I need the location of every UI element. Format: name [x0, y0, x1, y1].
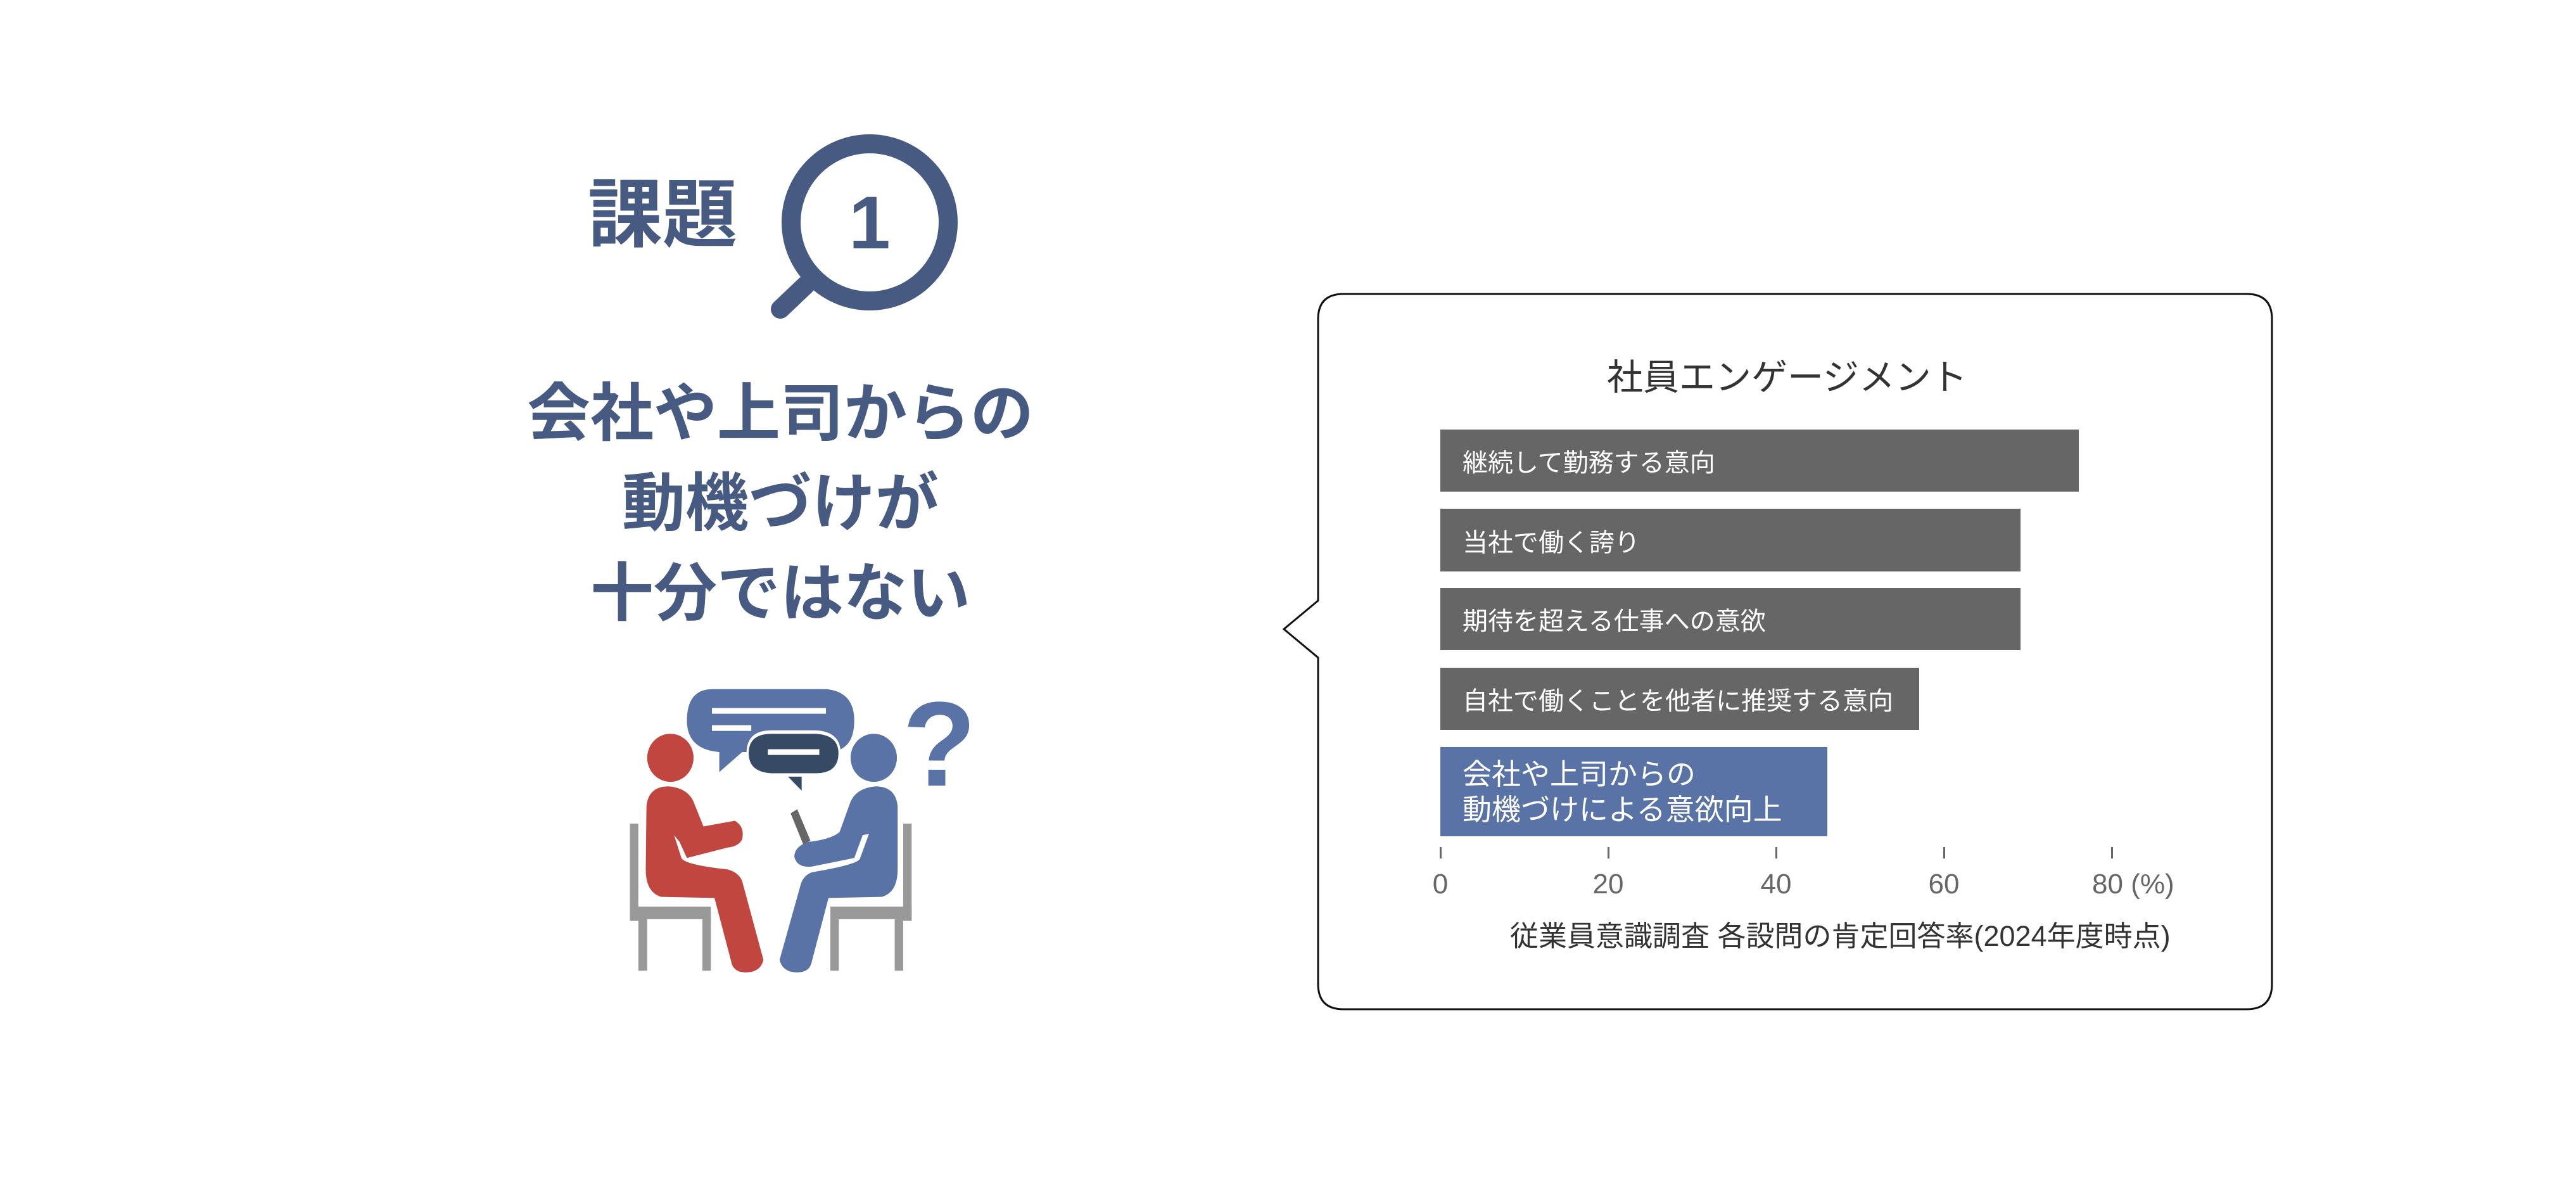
bar: 継続して勤務する意向: 継続して勤務する意向 [1462, 449, 1715, 477]
bar: 当社で働く誇り: 当社で働く誇り [1462, 528, 1640, 556]
pen [790, 809, 811, 845]
axis [1433, 847, 2174, 900]
bar: highlighted: 動機づけによる意欲向上 [1462, 793, 1782, 826]
bar: 自社で働くことを他者に推奨する意向: 自社で働くことを他者に推奨する意向 [1462, 687, 1893, 715]
icon: big speech bubble [687, 689, 854, 772]
icon: magnifier with number 1 [771, 134, 958, 319]
illustration: two people talking [630, 689, 912, 972]
bar: 当社で働く誇り [1440, 509, 2021, 571]
footnote: 従業員意識調査 各設問の肯定回答率(2024年度時点) [1510, 920, 2171, 952]
icon: small dark bubble [747, 732, 839, 794]
bar chart [1440, 430, 2079, 836]
red person [645, 734, 763, 972]
bar: 期待を超える仕事への意欲: 期待を超える仕事への意欲 [1462, 608, 1766, 635]
heading: main statement: 動機づけが [622, 468, 939, 539]
axis: 20 [1593, 869, 1623, 900]
bar: 自社で働くことを他者に推奨する意向 [1440, 668, 1919, 730]
bar: highlighted [1440, 747, 1827, 836]
heading: main statement [527, 378, 1034, 629]
axis: 0 [1433, 869, 1448, 900]
bar: 期待を超える仕事への意欲 [1440, 588, 2021, 650]
heading: 課題: 課題 [588, 174, 737, 257]
icon: magnifier with number 1: 1 [849, 181, 891, 265]
heading: main statement: 十分ではない [590, 558, 970, 629]
panel: engagement chart callout [1282, 293, 2273, 1010]
icon: question mark: ? [903, 677, 976, 812]
chart title: 社員エンゲージメント [1607, 357, 1967, 398]
blue person [780, 734, 898, 972]
axis: 60 [1929, 869, 1959, 900]
heading: main statement: 会社や上司からの [527, 378, 1034, 449]
bar: 継続して勤務する意向 [1440, 430, 2079, 492]
axis: 40 [1761, 869, 1791, 900]
axis: 80 (%) [2092, 869, 2174, 900]
bar: highlighted: 会社や上司からの [1462, 758, 1696, 791]
